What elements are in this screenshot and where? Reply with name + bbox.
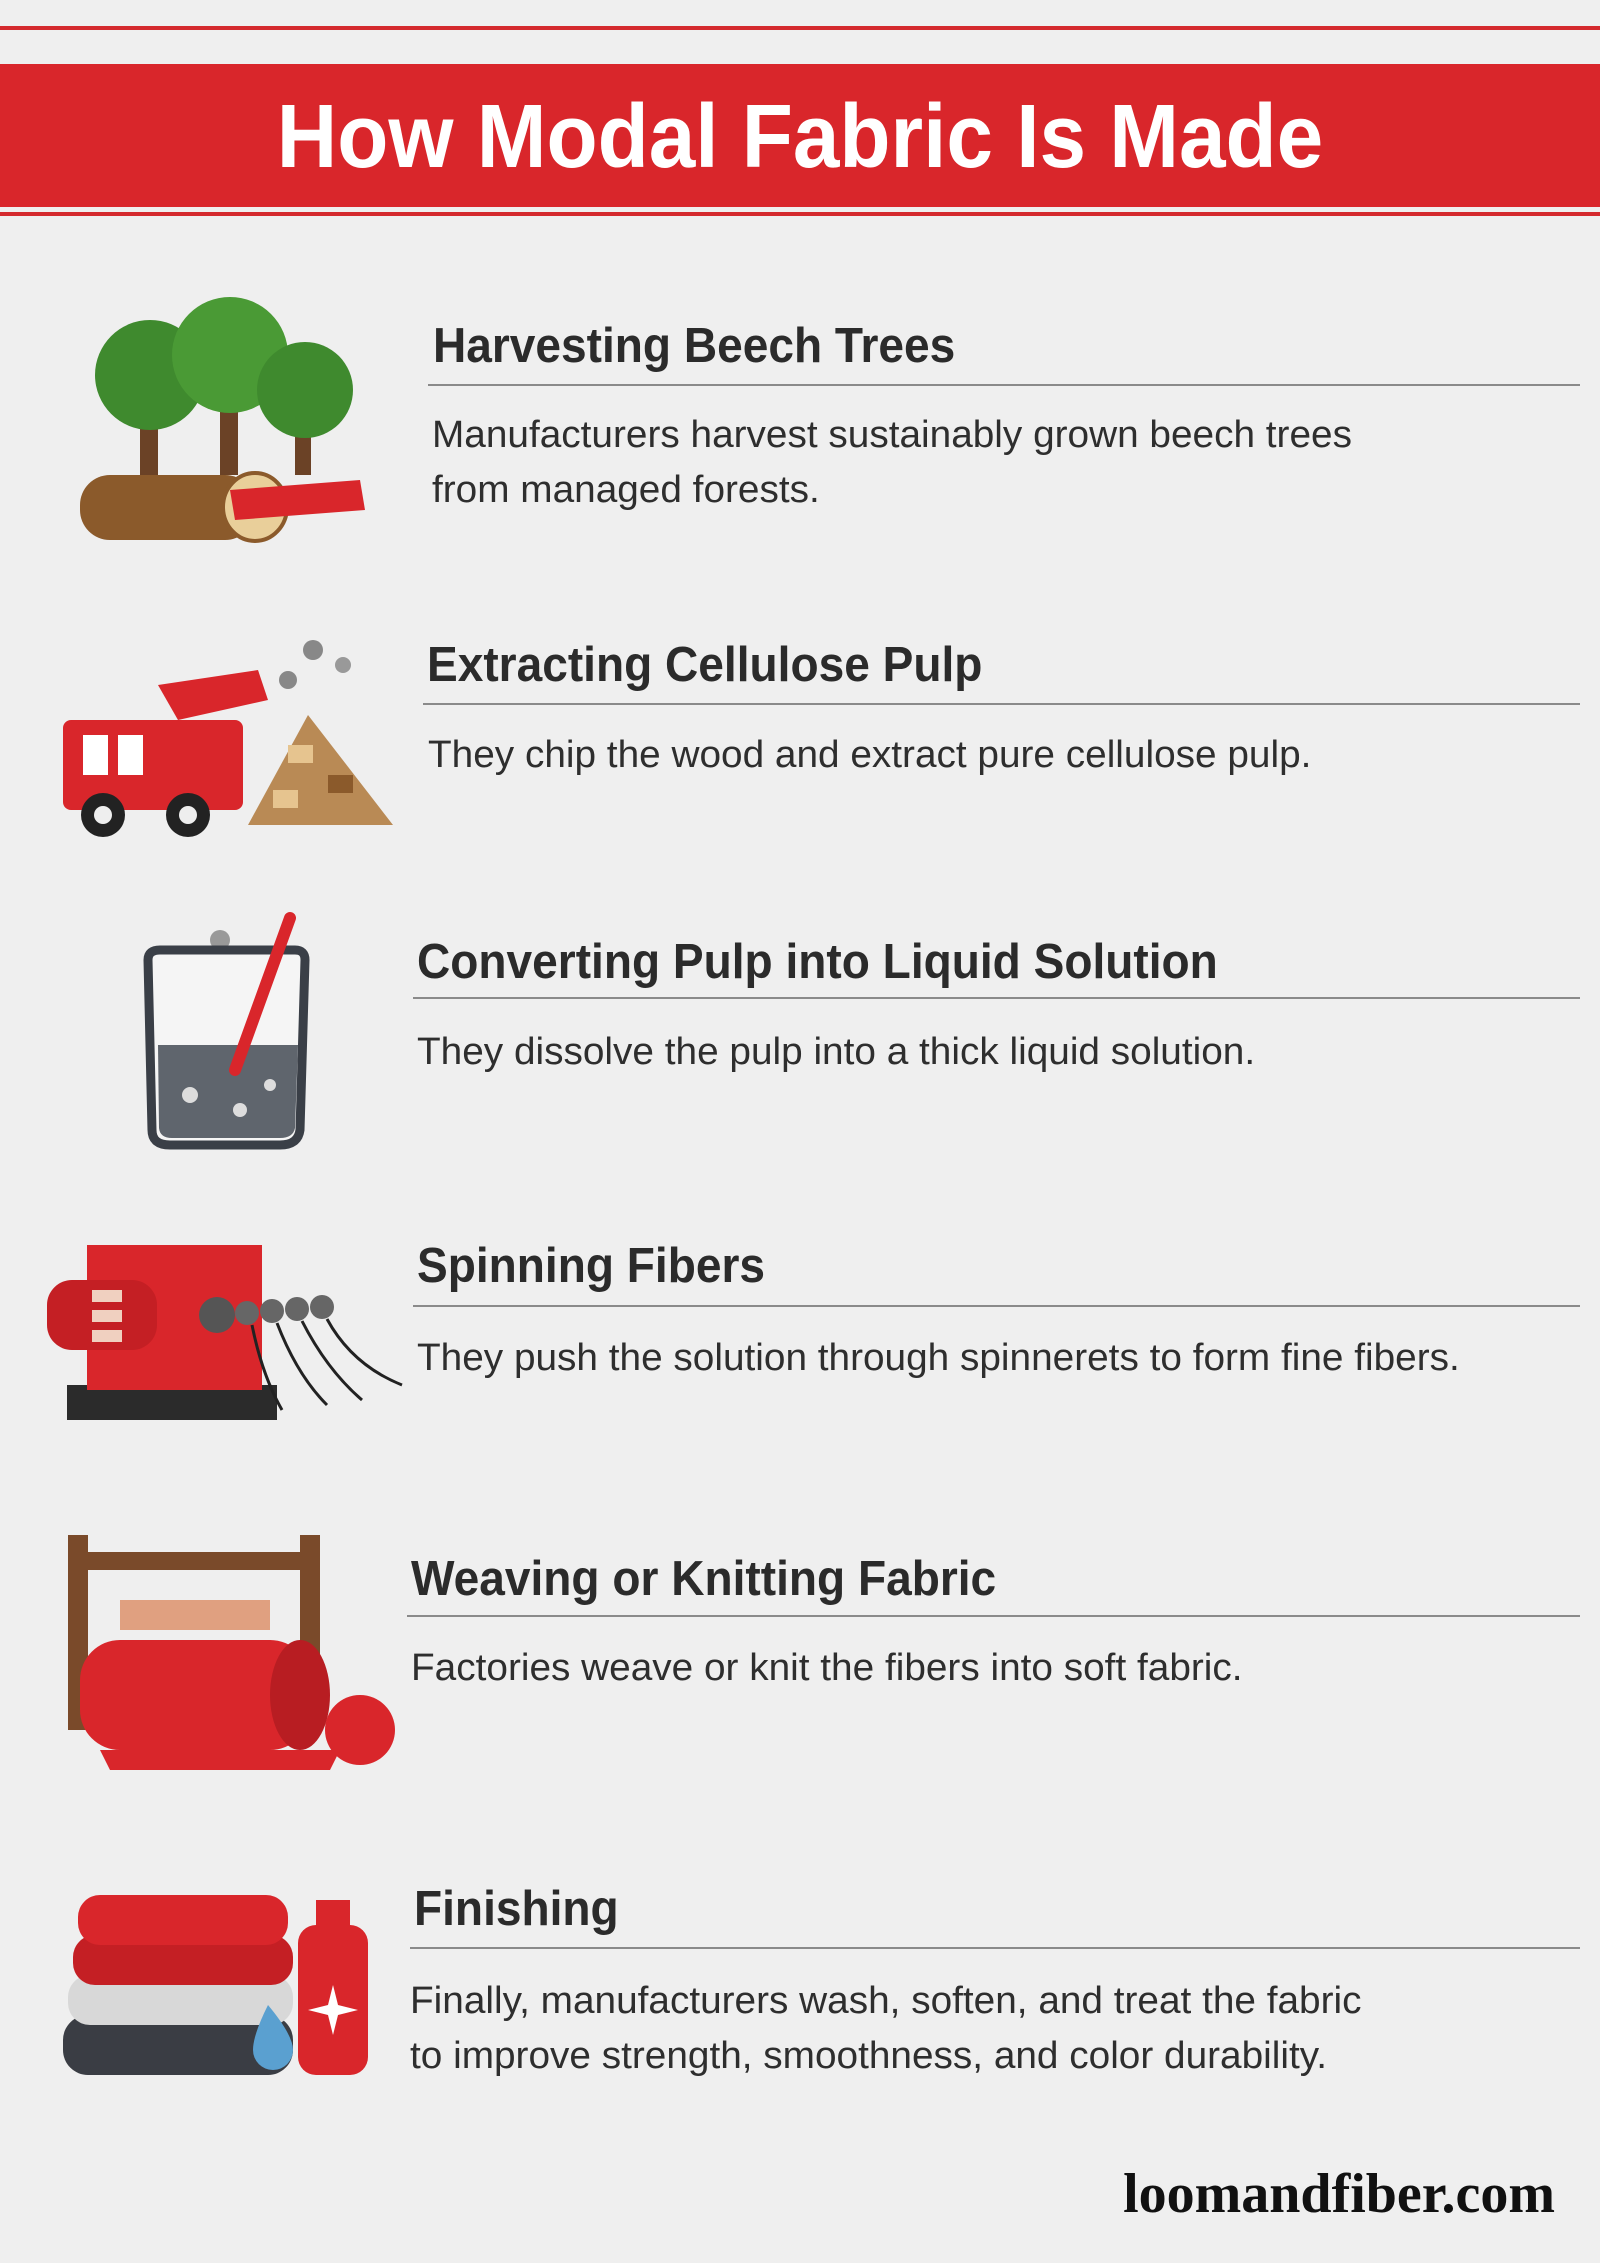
icon: wood chipper truck xyxy=(63,640,393,837)
step 3 heading: Converting Pulp into Liquid Solution xyxy=(417,935,1218,989)
icon: trees and log xyxy=(80,297,365,543)
step 6 heading: Finishing xyxy=(414,1882,619,1936)
step 3 text: They dissolve the pulp into a thick liquid solution. xyxy=(417,1031,1255,1073)
step 2 text: They chip the wood and extract pure cellulose pulp. xyxy=(428,734,1311,776)
title banner xyxy=(0,64,1600,207)
step 6 text: to improve strength, smoothness, and color durability. xyxy=(410,2035,1327,2077)
step 2 heading: Extracting Cellulose Pulp xyxy=(427,638,982,692)
step 1 text xyxy=(432,414,1352,511)
step 6 text xyxy=(410,1980,1362,2077)
step 5 text: Factories weave or knit the fibers into soft fabric. xyxy=(411,1647,1243,1689)
step 4 text: They push the solution through spinnerets to form fine fibers. xyxy=(417,1337,1460,1379)
step 5 heading: Weaving or Knitting Fabric xyxy=(411,1552,996,1606)
step 1 heading: Harvesting Beech Trees xyxy=(433,319,955,373)
step 4 heading: Spinning Fibers xyxy=(417,1239,765,1293)
title: How Modal Fabric Is Made xyxy=(277,87,1323,187)
icon: spinning machine xyxy=(47,1245,402,1420)
step 1 text: from managed forests. xyxy=(432,469,820,511)
step 6 text: Finally, manufacturers wash, soften, and treat the fabric xyxy=(410,1980,1362,2022)
icon: beaker with solution xyxy=(144,912,310,1150)
step 1 text: Manufacturers harvest sustainably grown beech trees xyxy=(432,414,1352,456)
icon: loom and fabric roll xyxy=(68,1535,395,1770)
footer website: loomandfiber.com xyxy=(1123,2163,1555,2225)
icon: folded fabric and bottle xyxy=(63,1895,368,2075)
